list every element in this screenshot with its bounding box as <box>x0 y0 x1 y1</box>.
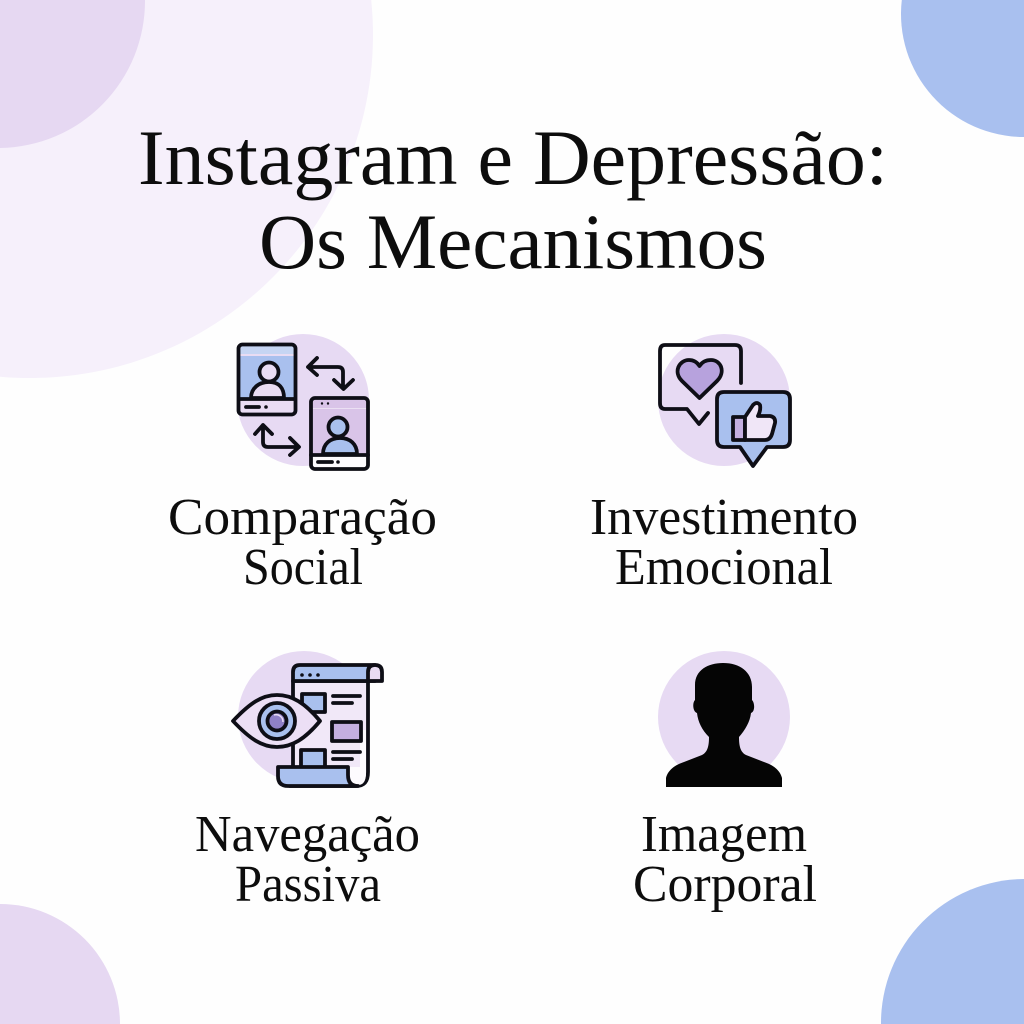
title <box>138 114 888 285</box>
icon: eye over scrolling feed <box>233 651 382 786</box>
panel: navegação passiva <box>195 651 420 913</box>
panel: imagem corporal <box>633 651 817 913</box>
label: Passiva <box>235 856 381 913</box>
label: Imagem <box>641 806 807 863</box>
icon: two profile phones with exchange arrows <box>237 334 369 469</box>
background circle: large pale lilac top left <box>0 0 373 378</box>
label <box>633 806 817 913</box>
title: Instagram e Depressão: <box>138 114 888 201</box>
label: Navegação <box>195 806 420 863</box>
label: Comparação <box>168 489 437 546</box>
label: Social <box>243 539 363 596</box>
label <box>590 489 858 596</box>
panel: investimento emocional <box>590 334 858 596</box>
background circle: small lilac top left <box>0 0 145 148</box>
background circle: lilac bottom left <box>0 904 120 1024</box>
panel: comparação social <box>168 334 437 596</box>
title: Os Mecanismos <box>259 198 767 285</box>
icon: heart and thumbs up speech bubbles <box>658 334 790 466</box>
label <box>168 489 437 596</box>
label: Investimento <box>590 489 858 546</box>
label: Emocional <box>615 539 833 596</box>
background circle: blue bottom right <box>881 879 1024 1024</box>
icon: body silhouette <box>658 651 790 787</box>
label <box>195 806 420 913</box>
label: Corporal <box>633 856 817 913</box>
background circle: blue top right <box>901 0 1024 137</box>
